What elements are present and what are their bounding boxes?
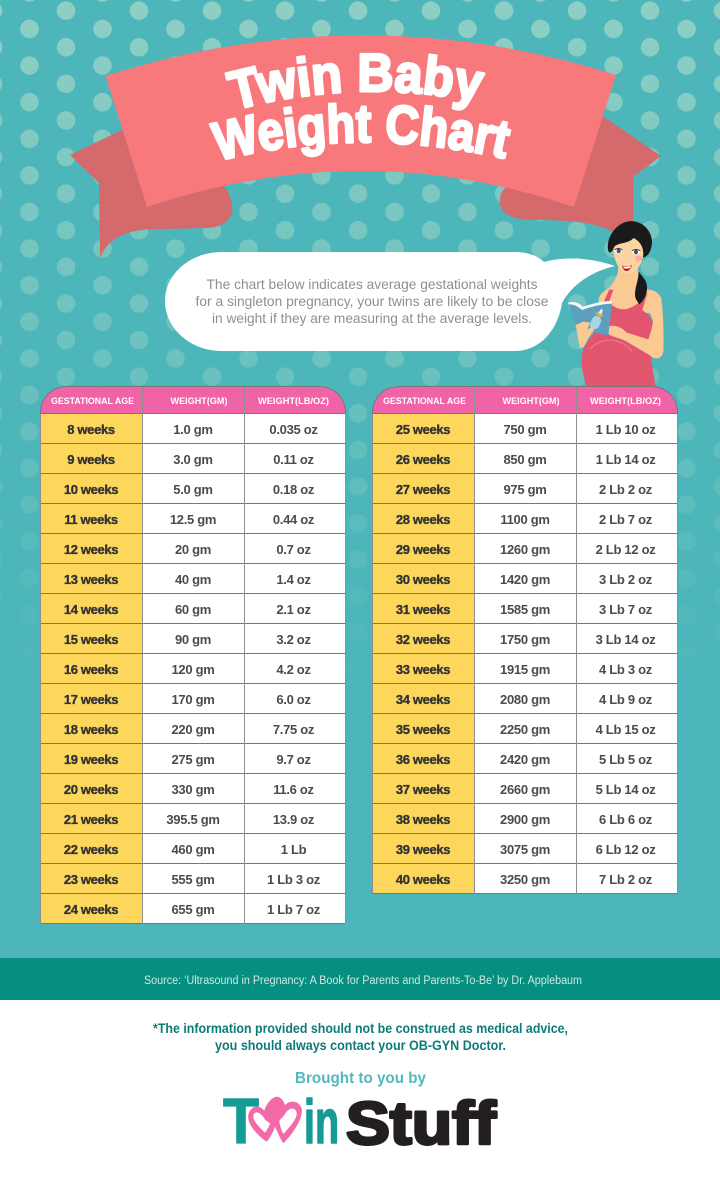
table header: GESTATIONAL AGE (383, 396, 466, 406)
bubble text: The chart below indicates average gestational weights (206, 276, 538, 292)
row: 24 weeks: 1 Lb 7 oz (267, 902, 321, 917)
row: 25 weeks (396, 422, 656, 437)
ponytail (635, 272, 647, 304)
title: Weight Chart (208, 102, 512, 160)
row: 11 weeks (64, 512, 315, 527)
row: 14 weeks: 14 weeks (64, 602, 118, 617)
row: 17 weeks: 170 gm (171, 692, 215, 707)
row: 33 weeks: 4 Lb 3 oz (599, 662, 653, 677)
row: 39 weeks (396, 842, 656, 857)
row: 23 weeks: 1 Lb 3 oz (267, 872, 321, 887)
row: 9 weeks: 3.0 gm (173, 452, 213, 467)
row: 28 weeks: 2 Lb 7 oz (599, 512, 653, 527)
row: 10 weeks (64, 482, 315, 497)
row: 26 weeks (396, 452, 656, 467)
row: 9 weeks: 0.11 oz (273, 452, 315, 467)
row: 24 weeks: 24 weeks (64, 902, 118, 917)
dress (582, 289, 656, 387)
row: 38 weeks: 38 weeks (396, 812, 450, 827)
row: 21 weeks: 21 weeks (64, 812, 118, 827)
row: 19 weeks (64, 752, 311, 767)
row: 31 weeks: 1585 gm (500, 602, 550, 617)
row: 20 weeks: 11.6 oz (273, 782, 315, 797)
row: 40 weeks: 7 Lb 2 oz (599, 872, 653, 887)
row: 39 weeks: 39 weeks (396, 842, 450, 857)
row: 10 weeks: 10 weeks (64, 482, 118, 497)
row: 25 weeks: 1 Lb 10 oz (596, 422, 656, 437)
source text: Source: ‘Ultrasound in Pregnancy: A Book for Parents and Parents-To-Be’ by Dr. Applebaum (144, 975, 582, 987)
row: 13 weeks: 40 gm (175, 572, 211, 587)
row: 15 weeks: 15 weeks (64, 632, 118, 647)
belly highlight (590, 340, 632, 351)
row: 38 weeks (396, 812, 653, 827)
row: 12 weeks: 20 gm (175, 542, 211, 557)
table background (373, 386, 677, 894)
row: 30 weeks: 3 Lb 2 oz (599, 572, 653, 587)
age column (41, 414, 142, 924)
row: 15 weeks (64, 632, 311, 647)
row: 34 weeks: 4 Lb 9 oz (599, 692, 653, 707)
row: 23 weeks: 555 gm (171, 872, 215, 887)
row: 11 weeks: 11 weeks (64, 512, 118, 527)
row: 12 weeks: 12 weeks (64, 542, 118, 557)
row: 40 weeks (396, 872, 653, 887)
row: 30 weeks: 1420 gm (500, 572, 550, 587)
row: 24 weeks: 655 gm (171, 902, 215, 917)
row: 32 weeks: 3 Lb 14 oz (596, 632, 656, 647)
row: 20 weeks: 330 gm (171, 782, 215, 797)
brought to you by: Brought to you by (295, 1070, 426, 1087)
table header: WEIGHT(GM) (170, 396, 228, 406)
row: 31 weeks (396, 602, 653, 617)
row: 37 weeks (396, 782, 656, 797)
row: 8 weeks (67, 422, 318, 437)
row: 15 weeks: 3.2 oz (276, 632, 311, 647)
source band (0, 958, 720, 1000)
row: 26 weeks: 1 Lb 14 oz (596, 452, 656, 467)
logo letter T: T (223, 1085, 259, 1157)
row: 17 weeks: 17 weeks (64, 692, 118, 707)
title: Twin Baby (224, 52, 486, 111)
row: 18 weeks: 18 weeks (64, 722, 118, 737)
row: 34 weeks: 34 weeks (396, 692, 450, 707)
row: 37 weeks: 37 weeks (396, 782, 450, 797)
hair (608, 221, 652, 258)
row: 20 weeks: 20 weeks (64, 782, 118, 797)
table header: GESTATIONAL AGE (51, 396, 134, 406)
row: 18 weeks: 220 gm (171, 722, 215, 737)
row: 13 weeks: 13 weeks (64, 572, 118, 587)
row: 36 weeks (396, 752, 653, 767)
row: 31 weeks: 3 Lb 7 oz (599, 602, 653, 617)
row: 8 weeks: 1.0 gm (173, 422, 213, 437)
row: 16 weeks: 16 weeks (64, 662, 118, 677)
row: 12 weeks: 0.7 oz (276, 542, 311, 557)
row: 26 weeks: 850 gm (503, 452, 547, 467)
right arm (608, 297, 664, 358)
face (613, 238, 644, 273)
row: 10 weeks: 0.18 oz (273, 482, 315, 497)
book pages (568, 301, 612, 310)
row: 8 weeks: 8 weeks (67, 422, 115, 437)
row: 29 weeks (396, 542, 656, 557)
row: 35 weeks: 35 weeks (396, 722, 450, 737)
row: 18 weeks (64, 722, 315, 737)
row: 30 weeks: 30 weeks (396, 572, 450, 587)
row: 28 weeks: 1100 gm (500, 512, 550, 527)
row: 21 weeks (64, 812, 315, 827)
row: 20 weeks (64, 782, 315, 797)
row: 11 weeks: 0.44 oz (273, 512, 315, 527)
row: 10 weeks: 5.0 gm (173, 482, 213, 497)
table header (40, 386, 346, 414)
age column (373, 414, 474, 894)
row: 40 weeks: 3250 gm (500, 872, 550, 887)
row: 34 weeks (396, 692, 653, 707)
row: 8 weeks: 0.035 oz (269, 422, 318, 437)
ribbon right fold (500, 117, 661, 240)
table header: WEIGHT(GM) (502, 396, 560, 406)
row: 17 weeks: 6.0 oz (276, 692, 311, 707)
row: 19 weeks: 9.7 oz (276, 752, 311, 767)
row: 32 weeks: 1750 gm (500, 632, 550, 647)
row: 23 weeks: 23 weeks (64, 872, 118, 887)
logo letters in: in (304, 1088, 339, 1157)
bubble text (196, 276, 549, 326)
table header: WEIGHT(LB/OZ) (258, 396, 329, 406)
row: 35 weeks: 2250 gm (500, 722, 550, 737)
left hand (576, 322, 594, 348)
row: 28 weeks (396, 512, 653, 527)
row: 33 weeks (396, 662, 653, 677)
row: 27 weeks (396, 482, 653, 497)
disclaimer: you should always contact your OB-GYN Doctor. (215, 1038, 506, 1053)
book (568, 302, 612, 335)
row: 22 weeks: 1 Lb (281, 842, 307, 857)
row: 36 weeks: 36 weeks (396, 752, 450, 767)
row: 26 weeks: 26 weeks (396, 452, 450, 467)
row: 9 weeks: 9 weeks (67, 452, 115, 467)
row: 32 weeks: 32 weeks (396, 632, 450, 647)
cheeks (635, 256, 642, 262)
row: 35 weeks: 4 Lb 15 oz (596, 722, 656, 737)
mouth (622, 265, 632, 271)
speech bubble (165, 252, 615, 351)
row: 14 weeks: 2.1 oz (276, 602, 311, 617)
row: 11 weeks: 12.5 gm (170, 512, 216, 527)
logo Stuff: Stuff (346, 1090, 497, 1157)
row: 17 weeks (64, 692, 311, 707)
disclaimer (153, 1021, 568, 1053)
row: 29 weeks: 29 weeks (396, 542, 450, 557)
body (568, 263, 664, 387)
table: weeks 25 to 40 (372, 386, 678, 894)
row: 31 weeks: 31 weeks (396, 602, 450, 617)
bubble text: in weight if they are measuring at the average levels. (212, 310, 532, 326)
row: 39 weeks: 6 Lb 12 oz (596, 842, 656, 857)
row: 40 weeks: 40 weeks (396, 872, 450, 887)
row: 33 weeks: 33 weeks (396, 662, 450, 677)
ribbon main band (106, 35, 616, 207)
row: 13 weeks (64, 572, 311, 587)
row: 15 weeks: 90 gm (175, 632, 211, 647)
row: 22 weeks: 460 gm (171, 842, 215, 857)
row: 33 weeks: 1915 gm (500, 662, 550, 677)
ribbon left fold (70, 130, 232, 258)
row: 14 weeks (64, 602, 311, 617)
row: 37 weeks: 2660 gm (500, 782, 550, 797)
row: 32 weeks (396, 632, 656, 647)
neck, shoulders and arm (599, 263, 662, 322)
row: 39 weeks: 3075 gm (500, 842, 550, 857)
row: 19 weeks: 275 gm (171, 752, 215, 767)
disclaimer: *The information provided should not be construed as medical advice, (153, 1021, 568, 1036)
baby bottle (589, 307, 606, 331)
row: 35 weeks (396, 722, 656, 737)
title (208, 52, 512, 160)
row: 38 weeks: 6 Lb 6 oz (599, 812, 653, 827)
table: weeks 8 to 24 (40, 386, 346, 924)
row: 29 weeks: 2 Lb 12 oz (596, 542, 656, 557)
row: 14 weeks: 60 gm (175, 602, 211, 617)
row: 36 weeks: 2420 gm (500, 752, 550, 767)
row: 21 weeks: 395.5 gm (166, 812, 220, 827)
illustration: pregnant woman reading (568, 221, 664, 387)
logo: TwinStuff (223, 1085, 497, 1157)
row: 29 weeks: 1260 gm (500, 542, 550, 557)
bubble text: for a singleton pregnancy, your twins are likely to be close (196, 293, 549, 309)
title ribbon (70, 35, 661, 258)
row: 9 weeks (67, 452, 315, 467)
row: 23 weeks (64, 872, 321, 887)
row: 30 weeks (396, 572, 653, 587)
row: 28 weeks: 28 weeks (396, 512, 450, 527)
table header: WEIGHT(LB/OZ) (590, 396, 661, 406)
row: 12 weeks (64, 542, 311, 557)
row: 22 weeks (64, 842, 307, 857)
table header (372, 386, 678, 414)
row: 27 weeks: 2 Lb 2 oz (599, 482, 653, 497)
row: 34 weeks: 2080 gm (500, 692, 550, 707)
row: 27 weeks: 975 gm (503, 482, 547, 497)
row: 37 weeks: 5 Lb 14 oz (596, 782, 656, 797)
icon: twin hearts (248, 1097, 302, 1143)
row: 22 weeks: 22 weeks (64, 842, 118, 857)
row: 16 weeks: 4.2 oz (276, 662, 311, 677)
eyes (615, 249, 640, 254)
row: 24 weeks (64, 902, 321, 917)
row: 16 weeks (64, 662, 311, 677)
row: 18 weeks: 7.75 oz (273, 722, 315, 737)
table background (41, 386, 345, 924)
row: 36 weeks: 5 Lb 5 oz (599, 752, 653, 767)
row: 21 weeks: 13.9 oz (273, 812, 315, 827)
row: 25 weeks: 25 weeks (396, 422, 450, 437)
row: 19 weeks: 19 weeks (64, 752, 118, 767)
row: 13 weeks: 1.4 oz (276, 572, 311, 587)
row: 38 weeks: 2900 gm (500, 812, 550, 827)
row: 27 weeks: 27 weeks (396, 482, 450, 497)
row: 16 weeks: 120 gm (171, 662, 215, 677)
row: 25 weeks: 750 gm (503, 422, 547, 437)
